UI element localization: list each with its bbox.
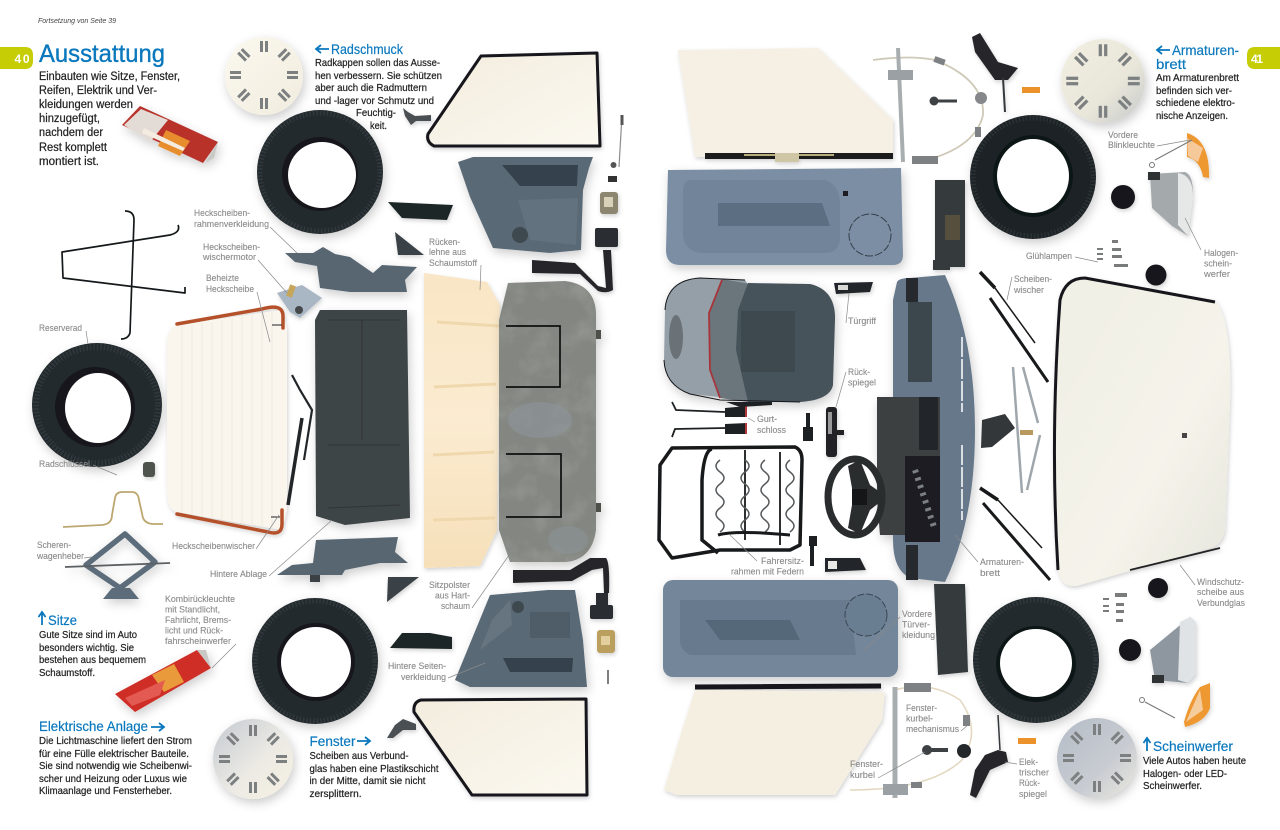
- label: Vordere Blinkleuchte: Blinkleuchte: [1108, 140, 1155, 150]
- hubcap top right: [1061, 39, 1145, 123]
- text: Elektrische Anlage: Sie sind notwendig wie Scheibenwi-: [39, 761, 192, 772]
- latch top: [600, 192, 618, 214]
- heading: Sitze: Sitze: [48, 612, 77, 628]
- text: Scheinwerfer: Halogen- oder LED-: [1143, 769, 1227, 780]
- label: Windschutzscheibe: [1180, 565, 1246, 608]
- tire top left: [257, 110, 383, 234]
- label: Heckscheibenwischer: [172, 515, 279, 551]
- seat frame with springs: [659, 447, 802, 558]
- black cap top: [1111, 185, 1135, 209]
- rear door window bottom: [414, 699, 587, 795]
- rear door window top: [428, 53, 600, 146]
- label: Fensterkurbelmechanismus: kurbel-: [906, 714, 933, 724]
- text: Elektrische Anlage: für eine Fülle elektrischer Bauteile.: [39, 749, 189, 760]
- text: Radschmuck: und -lager vor Schmutz und: [315, 96, 434, 107]
- page tab 41: 41: [1251, 52, 1263, 66]
- label: Rückspiegel: Rück-: [848, 367, 870, 377]
- heading: Fenster: Fenster: [310, 733, 356, 749]
- seat belt bottom: [513, 558, 613, 619]
- text: Armaturenbrett: nische Anzeigen.: [1156, 111, 1228, 122]
- bulbs top: [1097, 240, 1128, 267]
- text: Elektrische Anlage: scher und Heizung oder Luxus wie: [39, 774, 187, 785]
- label: Scheibenwischer: wischer: [1013, 285, 1044, 295]
- label: Sitzpolster aus Hartschaum: aus Hart-: [435, 590, 470, 600]
- label: Heckscheibenwischermotor: wischermotor: [202, 252, 256, 262]
- label: Kombirückleuchte: fahrscheinwerfer: [165, 636, 231, 646]
- label: Armaturenbrett: [955, 535, 1024, 578]
- front indicator top: [1187, 133, 1209, 178]
- text: Armaturenbrett: [1156, 73, 1239, 122]
- label: Radschlüssel: [39, 459, 117, 475]
- label: Radschlüssel: Radschlüssel: [39, 459, 90, 469]
- front door panel bottom: [663, 580, 898, 677]
- spare wheel bracket: [62, 211, 185, 339]
- mirror top: [972, 33, 1018, 112]
- heading: Armaturenbrett: Armaturen-: [1172, 42, 1239, 58]
- label: Elektrischer Rückspiegel: Rück-: [1019, 778, 1040, 788]
- headlight bottom: [1150, 617, 1196, 683]
- label: Hintere Seitenverkleidung: Hintere Seiten-: [388, 661, 446, 671]
- label: Fensterkurbel: kurbel: [850, 770, 875, 780]
- bulbs bottom: [1103, 593, 1127, 622]
- text: Radschmuck: keit.: [370, 121, 387, 132]
- label: Fahrersitzrahmen: Fahrersitz-: [761, 556, 804, 566]
- intro text: hinzugefügt,: [39, 113, 100, 125]
- intro text: montiert ist.: [39, 156, 99, 168]
- text: Radschmuck: Radkappen sollen das Ausse-: [315, 58, 440, 69]
- dashboard: [877, 275, 975, 582]
- label: Halogenscheinwerfer: schein-: [1204, 258, 1232, 268]
- label: Beheizte Heckscheibe: [206, 273, 270, 342]
- heated rear window: [167, 307, 287, 533]
- tire bottom right: [973, 597, 1099, 723]
- wiper linkage: [981, 367, 1040, 493]
- front door glass bottom: [664, 686, 885, 795]
- label: Reserverad: [39, 323, 88, 344]
- intro text: Reifen, Elektrik und Ver-: [39, 85, 157, 97]
- hubcap bottom left: [213, 719, 293, 799]
- mirror bottom: [970, 715, 1008, 798]
- text: Sitze: Schaumstoff.: [39, 668, 95, 679]
- label: Vordere Türverkleidung: Türver-: [902, 620, 930, 630]
- label: Rückenlehne aus Schaumstoff: Rücken-: [429, 237, 460, 247]
- hubcap top left: [225, 37, 303, 115]
- label: Beheizte Heckscheibe: Heckscheibe: [206, 284, 254, 294]
- text: Fenster: Scheiben aus Verbund-: [310, 751, 408, 762]
- text: Scheinwerfer: Scheinwerfer.: [1143, 781, 1202, 792]
- front indicator bottom: [1184, 683, 1210, 727]
- label: Elektrischer Rückspiegel: trischer: [1019, 768, 1049, 778]
- wheel wrench: [63, 492, 163, 527]
- label: Fensterkurbelmechanismus: [906, 703, 968, 734]
- door handle bottom: [825, 558, 866, 572]
- intro text: nachdem der: [39, 127, 103, 139]
- wiper motor rear: [277, 284, 322, 318]
- label: Halogenscheinwerfer: werfer: [1203, 269, 1230, 279]
- door handle top: [834, 282, 873, 294]
- seat belt buckles: [672, 402, 772, 437]
- label: Armaturenbrett: brett: [980, 568, 1001, 578]
- text: Radschmuck: aber auch die Radmuttern: [315, 83, 427, 94]
- label: Vordere Türverkleidung: [864, 609, 935, 650]
- label: Rückspiegel: [836, 367, 876, 407]
- text: Fenster: glas haben eine Plastikschicht: [310, 764, 439, 775]
- text: Elektrische Anlage: Die Lichtmaschine liefert den Strom: [39, 736, 192, 747]
- heading: Ausstattung: Ausstattung: [39, 40, 165, 68]
- text: Armaturenbrett: schiedene elektro-: [1156, 98, 1235, 109]
- black cap bottom: [1148, 578, 1168, 598]
- label: Rückenlehne aus Schaumstoff: Schaumstoff: [429, 258, 478, 268]
- label: Gurtschloss: [748, 414, 787, 435]
- label: Rückenlehne aus Schaumstoff: lehne aus: [429, 247, 467, 257]
- page tab 40: 40: [14, 52, 30, 66]
- label: Gurtschloss: schloss: [757, 425, 787, 435]
- tail light top: [122, 106, 218, 163]
- rear side panel bottom: [455, 590, 587, 687]
- label: Hintere Ablage: [210, 520, 332, 579]
- crank handle bottom: [387, 719, 416, 738]
- scissor jack: [65, 534, 170, 599]
- label: Elektrischer Rückspiegel: spiegel: [1019, 789, 1047, 799]
- front door glass top: [678, 48, 893, 162]
- orange indicator top: [1022, 87, 1040, 93]
- intro text: Rest komplett: [39, 142, 108, 154]
- label: Scherenwagenheber: [36, 540, 92, 561]
- text: Scheinwerfer: Viele Autos haben heute: [1143, 756, 1246, 767]
- black cap 2: [1146, 264, 1166, 286]
- tray top: [388, 202, 453, 220]
- page tab 40: [0, 47, 33, 69]
- text: Fenster: [310, 751, 439, 800]
- label: Vordere Türverkleidung: kleidung: [902, 630, 935, 640]
- triangle trim bottom: [387, 577, 419, 602]
- seat: [664, 278, 835, 402]
- latch bottom: [597, 630, 615, 653]
- label: Kombirückleuchte: Kombirückleuchte: [165, 594, 235, 604]
- text: Armaturenbrett: Am Armaturenbrett: [1156, 73, 1239, 84]
- stalk switch top: [803, 413, 813, 441]
- text: Sitze: Gute Sitze sind im Auto: [39, 630, 137, 641]
- label: Fensterkurbelmechanismus: Fenster-: [906, 703, 937, 713]
- text: Radschmuck: [315, 58, 442, 132]
- label: Elektrischer Rückspiegel: Elek-: [1019, 757, 1038, 767]
- text: Scheinwerfer: [1143, 756, 1246, 792]
- window regulator top: [873, 48, 987, 164]
- wipers top: [980, 272, 1048, 382]
- label: Heckscheibenwischer: Heckscheibenwischer: [172, 541, 255, 551]
- spare tire: [32, 343, 162, 467]
- label: Glühlampen: [1026, 251, 1098, 262]
- label: Glühlampen: Glühlampen: [1026, 251, 1072, 261]
- rear window frame trim bottom: [277, 537, 408, 582]
- label: Reserverad: Reserverad: [39, 323, 82, 333]
- rear side panel top: [458, 157, 593, 253]
- page tab 41: [1247, 47, 1280, 69]
- label: Türgriff: Türgriff: [848, 316, 877, 326]
- label: Windschutzscheibe: Verbundglas: [1197, 598, 1246, 608]
- text: Radschmuck: hen verbessern. Sie schützen: [315, 71, 442, 82]
- text: Elektrische Anlage: [39, 736, 192, 797]
- label: Vordere Türverkleidung: Vordere: [902, 609, 932, 619]
- text: Sitze: [39, 630, 146, 679]
- parcel shelf: [315, 310, 410, 525]
- wipers bottom: [980, 488, 1050, 580]
- label: Vordere Blinkleuchte: [1108, 130, 1190, 150]
- screw bottom: [607, 670, 609, 684]
- label: Fensterkurbel: Fenster-: [850, 759, 883, 769]
- interior mirror: [826, 407, 844, 457]
- label: Windschutzscheibe: scheibe aus: [1197, 587, 1245, 597]
- tail light bottom: [115, 650, 211, 712]
- stalk switch bottom: [809, 536, 817, 566]
- hubcap bottom right: [1057, 718, 1137, 798]
- label: Heckscheibenwischermotor: [202, 242, 287, 293]
- text: Armaturenbrett: befinden sich ver-: [1156, 86, 1232, 97]
- label: Sitzpolster aus Hartschaum: Sitzpolster: [429, 580, 470, 590]
- label: Sitzpolster aus Hartschaum: schaum: [441, 601, 470, 611]
- label: Scheibenwischer: [1007, 274, 1052, 300]
- tire bottom left: [252, 598, 378, 724]
- steering wheel: [828, 459, 882, 535]
- label: Rückenlehne aus Schaumstoff: [429, 237, 481, 290]
- label: Kombirückleuchte: [165, 594, 236, 668]
- tire top right: [970, 115, 1096, 239]
- label: Hintere Ablage: Hintere Ablage: [210, 569, 267, 579]
- seat cushion: [499, 281, 601, 562]
- window regulator bottom: [850, 683, 972, 798]
- orange indicator bottom: [1018, 738, 1036, 744]
- heading: Radschmuck: Radschmuck: [331, 41, 404, 57]
- crank handle top: [403, 108, 431, 125]
- label: Elektrischer Rückspiegel: [1005, 757, 1049, 799]
- text: Radschmuck: Feuchtig-: [356, 108, 396, 119]
- label: Fensterkurbel: [850, 752, 925, 780]
- rear wiper: [288, 375, 312, 505]
- triangle trim top: [395, 232, 424, 255]
- label: Türgriff: [846, 293, 877, 326]
- heading: Elektrische Anlage: Elektrische Anlage: [39, 718, 148, 734]
- label: Hintere Seitenverkleidung: verkleidung: [401, 672, 446, 682]
- label: Fensterkurbelmechanismus: mechanismus: [906, 724, 960, 734]
- label: Fahrersitzrahmen: [730, 535, 804, 576]
- text: Fenster: zersplittern.: [310, 789, 362, 800]
- nut: [143, 462, 155, 477]
- label: Kombirückleuchte: mit Standlicht,: [165, 604, 220, 614]
- foam backrest: [424, 273, 500, 568]
- dark trim panel bottom: [934, 584, 968, 675]
- wire top: [1150, 140, 1192, 168]
- label: Kombirückleuchte: licht und Rück-: [165, 626, 223, 636]
- rod and key top: [608, 115, 624, 182]
- label: Fahrersitzrahmen: rahmen mit Federn: [731, 566, 804, 576]
- label: Heckscheibenwischermotor: Heckscheiben-: [203, 242, 260, 252]
- headlight top: [1148, 172, 1193, 236]
- label: Hintere Seitenverkleidung: [388, 661, 485, 682]
- wire bottom: [1140, 698, 1175, 718]
- label: Beheizte Heckscheibe: Beheizte: [206, 273, 239, 283]
- intro text: Einbauten wie Sitze, Fenster,: [39, 71, 180, 83]
- text: Elektrische Anlage: Klimaanlage und Fensterheber.: [39, 786, 172, 797]
- label: Kombirückleuchte: Fahrlicht, Brems-: [165, 615, 231, 625]
- text: Fenster: in der Mitte, damit sie nicht: [310, 776, 426, 787]
- label: Halogenscheinwerfer: Halogen-: [1204, 248, 1238, 258]
- seat belt top: [532, 228, 618, 292]
- label: Gurtschloss: Gurt-: [757, 414, 777, 424]
- label: Scheibenwischer: Scheiben-: [1014, 274, 1052, 284]
- rear window frame trim top: [285, 247, 417, 292]
- label: Heckscheibenrahmenverkleidung: [194, 208, 297, 253]
- label: Vordere Blinkleuchte: Vordere: [1108, 130, 1138, 140]
- label: Armaturenbrett: Armaturen-: [980, 557, 1024, 567]
- label: Heckscheibenrahmenverkleidung: rahmenverkleidung: [194, 219, 269, 229]
- running note: Fortsetzung von Seite 39: [38, 16, 116, 25]
- heading: Scheinwerfer: Scheinwerfer: [1153, 738, 1233, 754]
- windshield: [1054, 278, 1230, 586]
- intro text: [39, 71, 180, 168]
- label: Sitzpolster aus Hartschaum: [429, 538, 521, 611]
- black cap 3: [1119, 639, 1141, 661]
- label: Windschutzscheibe: Windschutz-: [1197, 577, 1244, 587]
- intro text: kleidungen werden: [39, 99, 133, 111]
- label: Scherenwagenheber: Scheren-: [37, 540, 71, 550]
- front door panel top: [666, 168, 903, 265]
- text: Sitze: bestehen aus bequemem: [39, 655, 146, 666]
- heading: Armaturenbrett: brett: [1156, 56, 1186, 72]
- label: Scherenwagenheber: wagenheber: [36, 551, 84, 561]
- dark trim panel top: [933, 180, 965, 270]
- label: Rückspiegel: spiegel: [848, 378, 876, 388]
- tray bottom: [390, 633, 452, 649]
- label: Heckscheibenrahmenverkleidung: Heckscheiben-: [194, 208, 250, 218]
- text: Sitze: besonders wichtig. Sie: [39, 643, 134, 654]
- heading: Armaturenbrett: [1156, 42, 1239, 72]
- label: Halogenscheinwerfer: [1185, 218, 1238, 279]
